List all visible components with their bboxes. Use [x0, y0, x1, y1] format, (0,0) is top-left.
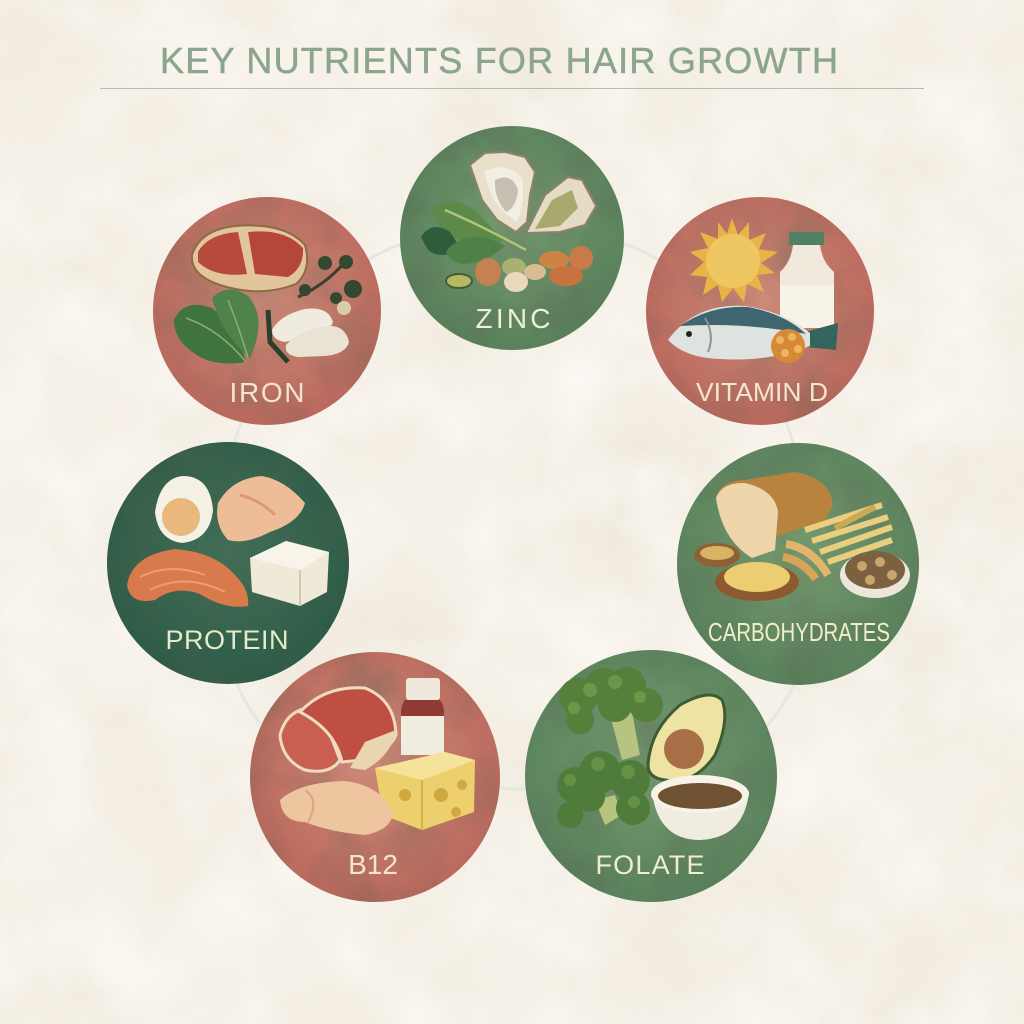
label: PROTEIN	[166, 625, 288, 655]
icon: spinach	[421, 201, 526, 264]
icon: cheese	[375, 752, 475, 830]
title: KEY NUTRIENTS FOR HAIR GROWTH	[160, 40, 838, 81]
icon: broccoli bottom	[557, 751, 650, 828]
icon: small bowl of grains	[694, 543, 740, 567]
icon: broccoli top	[559, 667, 663, 760]
panel: carbohydrates	[677, 443, 919, 685]
icon: oysters	[470, 152, 596, 233]
icon: sun	[690, 218, 778, 302]
icon: steak	[192, 225, 307, 291]
icon: avocado	[648, 695, 725, 781]
icon: mushrooms	[268, 309, 349, 362]
icon: spinach leaves	[174, 289, 259, 364]
icon: sprig	[298, 255, 362, 315]
icon: sliced meat	[280, 688, 396, 771]
label: ZINC	[476, 303, 550, 334]
label: VITAMIN D	[696, 377, 828, 407]
icon: salmon fillet	[127, 549, 248, 607]
icon: fish	[668, 306, 838, 359]
icon: bread loaf	[716, 472, 833, 558]
panel: b12	[250, 652, 500, 902]
panel: vitamin d	[646, 197, 874, 425]
icon: pasta	[805, 505, 892, 562]
connecting arcs	[234, 243, 794, 789]
label: CARBOHYDRATES	[708, 617, 890, 647]
icon: chicken	[217, 476, 305, 541]
label: FOLATE	[596, 850, 704, 880]
panel: folate	[525, 650, 777, 902]
icon: supplement bottle	[401, 678, 444, 755]
icon: nuts and seeds	[446, 246, 593, 292]
icon: milk bottle	[780, 232, 834, 328]
panel: zinc	[400, 126, 624, 350]
icon: tofu	[250, 541, 329, 606]
icon: boiled egg	[155, 476, 213, 543]
icon: bread slices	[783, 544, 828, 579]
label: IRON	[230, 377, 304, 408]
label: B12	[348, 849, 398, 880]
panel: iron	[153, 197, 381, 425]
icon: salmon roe	[771, 329, 805, 363]
icon: sliced chicken	[280, 781, 393, 835]
panel: protein	[107, 442, 349, 684]
icon: bowl of beans	[840, 551, 910, 598]
icon: bowl of lentils	[651, 775, 749, 840]
icon: bowl of corn	[715, 562, 799, 601]
